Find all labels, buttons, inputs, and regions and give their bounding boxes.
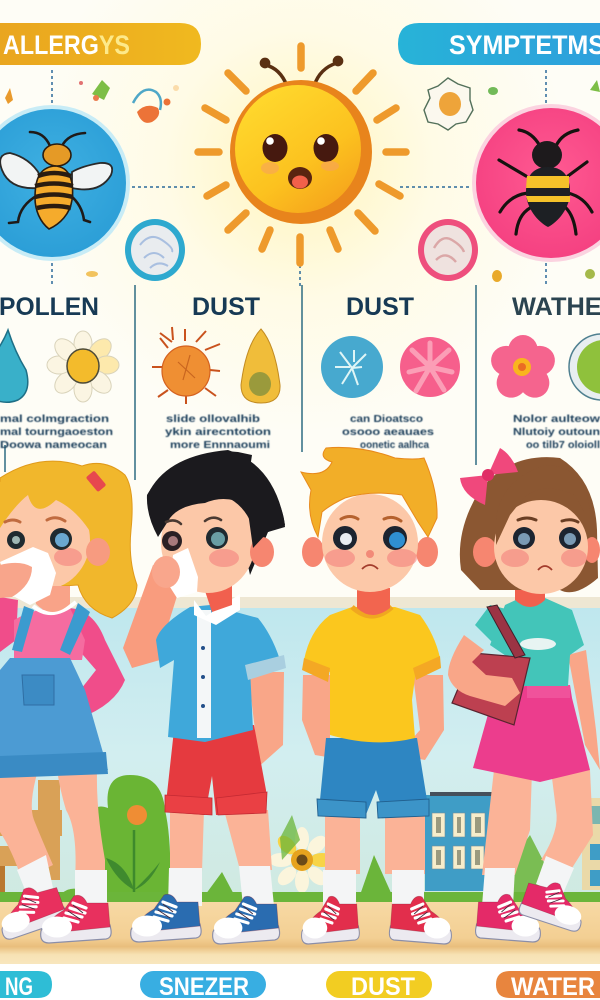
heading: dust column three: DUST	[346, 293, 414, 321]
hand in pocket	[64, 710, 88, 735]
tissue and hand	[0, 547, 56, 605]
teal t-shirt	[475, 598, 584, 686]
wall panel with sun glow	[0, 0, 600, 598]
icon: green disc	[569, 334, 600, 400]
neck	[515, 590, 545, 607]
blush	[501, 549, 587, 567]
text: dust column three: oonetic aalhca	[360, 439, 429, 451]
blue shirt	[156, 594, 286, 742]
raised arm	[123, 565, 182, 668]
text: weather column	[513, 413, 600, 451]
socks	[168, 866, 274, 906]
socks	[323, 870, 424, 906]
bug head	[532, 141, 562, 169]
banner: allergys: ALLERGYS	[3, 30, 130, 60]
pink sleeves	[0, 597, 125, 718]
legs	[170, 810, 272, 872]
socks	[17, 855, 107, 910]
sun rays	[198, 46, 406, 263]
head	[494, 500, 588, 594]
child: blonde girl sneezing	[0, 461, 137, 943]
bug legs and antennae	[499, 130, 592, 234]
sunflower	[269, 827, 334, 893]
bag and strap	[452, 605, 530, 725]
tissue and hand	[152, 548, 198, 598]
icon: sun character	[198, 46, 406, 263]
neck	[203, 585, 232, 612]
shoes	[0, 880, 111, 943]
legs	[0, 770, 105, 880]
text: dust column two: slide ollovalhib	[166, 413, 260, 425]
hair back and ponytail	[0, 461, 137, 618]
blush	[209, 549, 239, 567]
green hills	[0, 815, 600, 903]
text: pollen column: mal tourngaoeston	[0, 426, 113, 438]
neck	[34, 586, 70, 612]
blush	[54, 548, 82, 566]
socks	[482, 856, 574, 906]
hair back	[460, 457, 598, 592]
eyes and brows	[5, 518, 72, 550]
legs	[325, 812, 425, 874]
icon: daisy	[47, 331, 119, 402]
icon: blue bee circle	[0, 105, 130, 261]
bee wings	[0, 153, 112, 189]
child: blond boy	[301, 447, 451, 944]
hair	[301, 447, 437, 537]
icon: small confetti shapes	[5, 80, 600, 282]
legs	[482, 770, 593, 875]
pink top	[14, 608, 85, 660]
dashed connector lines	[52, 70, 546, 287]
red shorts	[165, 725, 267, 815]
bee striped body	[35, 166, 73, 229]
icon: pink flower with yellow centre	[487, 335, 559, 404]
left arm and hand	[448, 635, 520, 706]
ear	[86, 538, 110, 566]
arms	[302, 675, 444, 760]
text: dust column two: ykin airecntotion	[165, 426, 271, 438]
bee head	[43, 144, 71, 166]
icon: orange bag	[133, 90, 170, 123]
ears	[302, 537, 438, 567]
icon: yellow seed	[241, 329, 280, 403]
text: dust column three: can Dioatsco	[350, 413, 423, 425]
icon: blue ring microbe	[125, 219, 185, 281]
hair	[147, 451, 285, 548]
label pill: dust	[326, 971, 432, 1000]
icon: pink bee circle	[472, 104, 600, 262]
blue shorts	[317, 738, 429, 818]
building	[425, 792, 494, 891]
icon: pink petal flower	[400, 337, 460, 397]
icon: orange spiky sun	[152, 327, 220, 404]
ear	[250, 537, 274, 567]
blue overall dress	[0, 603, 108, 778]
eyes and brows	[162, 518, 228, 551]
eyes, brows and mouth	[333, 516, 407, 569]
column divider lines	[5, 285, 476, 480]
hair clip	[86, 470, 106, 492]
heading: dust column two: DUST	[192, 293, 260, 321]
collar	[33, 602, 76, 613]
text: pollen column: mal colmgraction	[0, 413, 109, 425]
text: pollen column: Doowa nameocan	[0, 439, 107, 451]
sun mouth	[288, 167, 312, 189]
icon: water drop	[0, 330, 28, 402]
pink bow	[460, 448, 518, 505]
shoes	[131, 894, 280, 944]
sky backdrop	[0, 608, 600, 903]
right arm	[235, 672, 284, 770]
hair back	[150, 450, 285, 575]
bottom white band	[0, 964, 600, 1000]
bench	[0, 780, 62, 906]
bee legs and antennae	[9, 132, 90, 223]
sun eyes	[262, 134, 338, 162]
right arm	[568, 650, 600, 770]
shelf ledge	[0, 597, 600, 608]
banner: allergys	[0, 23, 201, 65]
text: dust column three	[342, 413, 434, 451]
fringe	[0, 466, 96, 538]
head	[161, 493, 255, 593]
pink skirt	[473, 685, 590, 782]
heading: pollen: POLLEN	[0, 293, 99, 321]
ears	[473, 537, 600, 567]
text: weather column: oo tilb7 oloioll	[526, 439, 600, 451]
text: weather column: Nolor aulteow	[513, 413, 600, 425]
text: dust column two	[165, 413, 271, 451]
bush with orange flower	[96, 775, 170, 900]
blush	[325, 549, 417, 567]
right building	[582, 798, 600, 890]
label pill: sneezing fragment	[0, 971, 52, 1000]
sun face disc	[230, 80, 372, 224]
sun antennae	[261, 57, 342, 86]
child: dark-haired boy sneezing	[123, 450, 286, 944]
bug striped body	[526, 167, 570, 227]
neck	[357, 588, 390, 615]
eyes, brows and mouth	[513, 518, 581, 570]
text: dust column three: osooo aeauaes	[342, 426, 434, 438]
description text blocks	[0, 413, 600, 451]
shoes	[476, 876, 589, 942]
head	[322, 494, 418, 592]
icon: blue dust disc	[321, 336, 383, 398]
fringe	[496, 465, 590, 545]
icon: pink ring microbe	[418, 219, 478, 281]
ground strip	[0, 902, 600, 964]
background scene	[0, 775, 600, 906]
child: brown-haired girl	[448, 448, 600, 942]
head	[0, 490, 90, 590]
yellow t-shirt	[302, 607, 441, 742]
banner: symptoms	[398, 23, 600, 65]
text: dust column two: more Ennnaoumi	[170, 439, 270, 451]
text: weather column: Nlutoiy outoun	[513, 426, 600, 438]
icon: white flower outline	[424, 78, 473, 130]
shoes	[302, 896, 451, 944]
text: pollen column	[0, 413, 113, 451]
